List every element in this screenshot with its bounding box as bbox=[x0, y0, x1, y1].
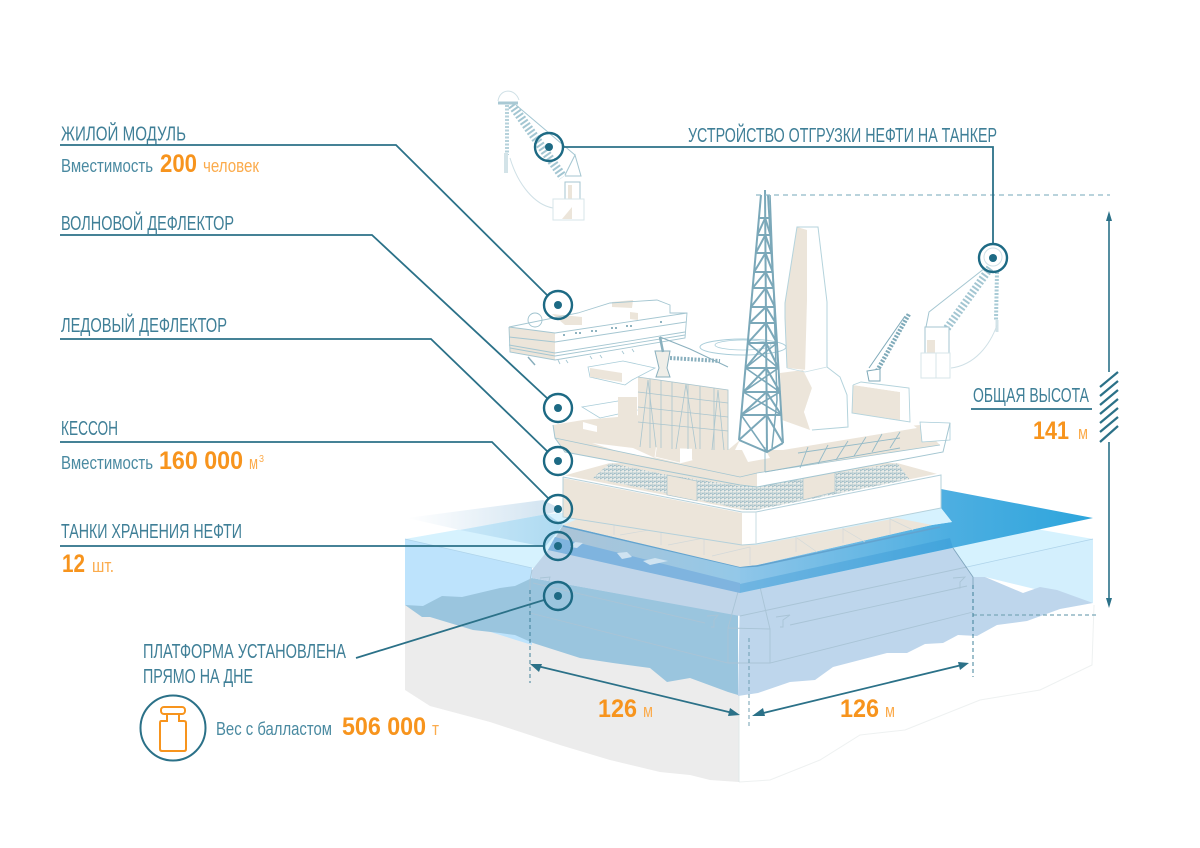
secondary module and helipad bbox=[588, 339, 786, 385]
drilling derrick bbox=[739, 190, 783, 452]
label: caisson: КЕССОН bbox=[61, 418, 118, 440]
marker: crane right bbox=[979, 244, 1007, 272]
label: oil tanks: ТАНКИ ХРАНЕНИЯ НЕФТИ bbox=[61, 521, 242, 543]
label: platform on seabed: ПРЯМО НА ДНЕ bbox=[143, 666, 253, 688]
label: loading device: УСТРОЙСТВО ОТГРУЗКИ НЕФТИ НА ТАНКЕР bbox=[688, 123, 997, 147]
label: living module: 200 bbox=[160, 150, 197, 178]
label: living module: ЖИЛОЙ МОДУЛЬ bbox=[61, 122, 186, 146]
marker: living module bbox=[544, 291, 572, 319]
label: total height: ОБЩАЯ ВЫСОТА bbox=[973, 385, 1089, 407]
label: ice deflector: ЛЕДОВЫЙ ДЕФЛЕКТОР bbox=[61, 313, 227, 337]
label: living module: человек bbox=[203, 156, 259, 176]
marker: ice deflector bbox=[544, 447, 572, 475]
marker: seabed bbox=[544, 582, 572, 610]
label: living module bbox=[61, 122, 259, 178]
dimension: height bbox=[756, 195, 1118, 615]
ice belt and blue water bbox=[548, 489, 1093, 593]
label: width left: 126 bbox=[598, 695, 637, 723]
small crane on module bbox=[655, 337, 728, 377]
marker: wave deflector bbox=[544, 394, 572, 422]
loading crane left bbox=[498, 91, 584, 220]
label: caisson bbox=[61, 418, 264, 475]
caisson underwater, upper left bbox=[532, 550, 740, 616]
label: total height: м bbox=[1078, 423, 1088, 443]
label: oil tanks: шт. bbox=[92, 556, 114, 576]
oil storage tanks deck bbox=[563, 518, 932, 567]
label: ballast weight: Вес с балластом bbox=[216, 719, 332, 739]
icon: weight bbox=[140, 696, 206, 760]
dimension: width left bbox=[530, 590, 749, 728]
label: caisson: м bbox=[249, 453, 258, 473]
label: width right: 126 bbox=[840, 695, 879, 723]
caisson contours bbox=[530, 548, 973, 663]
loading crane right bbox=[921, 248, 1002, 378]
water volume bbox=[405, 500, 1093, 645]
label: caisson: 3 bbox=[259, 454, 264, 465]
right module building bbox=[852, 382, 910, 422]
marker: crane left bbox=[535, 133, 563, 161]
label: caisson: 160 000 bbox=[159, 447, 243, 475]
living module bbox=[509, 300, 687, 365]
label: width left: м bbox=[643, 701, 653, 721]
label: ballast weight bbox=[216, 713, 439, 741]
flare tower bbox=[780, 227, 848, 430]
marker: oil tanks bbox=[544, 532, 572, 560]
seabed block bbox=[405, 600, 1094, 782]
label: total height: 141 bbox=[1033, 417, 1069, 445]
crane on right module bbox=[867, 314, 909, 381]
label: platform on seabed: ПЛАТФОРМА УСТАНОВЛЕНА bbox=[143, 641, 346, 663]
label: ballast weight: 506 000 bbox=[342, 713, 426, 741]
label: width right: м bbox=[885, 701, 895, 721]
label: total height bbox=[971, 385, 1092, 445]
label: platform on seabed bbox=[143, 641, 346, 688]
main module building bbox=[638, 370, 740, 450]
caisson top box bbox=[563, 463, 941, 545]
label: oil tanks bbox=[61, 521, 242, 578]
marker: caisson bbox=[544, 495, 572, 523]
leader lines bbox=[60, 145, 993, 658]
caisson underwater, right bbox=[738, 548, 1093, 696]
wave deflector hull bbox=[553, 397, 950, 487]
label: living module: Вместимость bbox=[61, 156, 153, 176]
label: wave deflector: ВОЛНОВОЙ ДЕФЛЕКТОР bbox=[61, 211, 234, 235]
label: oil tanks: 12 bbox=[62, 550, 85, 578]
label: ballast weight: т bbox=[432, 719, 439, 739]
seabed seen through water, left bbox=[405, 578, 738, 695]
dimension: width right bbox=[752, 585, 973, 716]
label: caisson: Вместимость bbox=[61, 453, 153, 473]
